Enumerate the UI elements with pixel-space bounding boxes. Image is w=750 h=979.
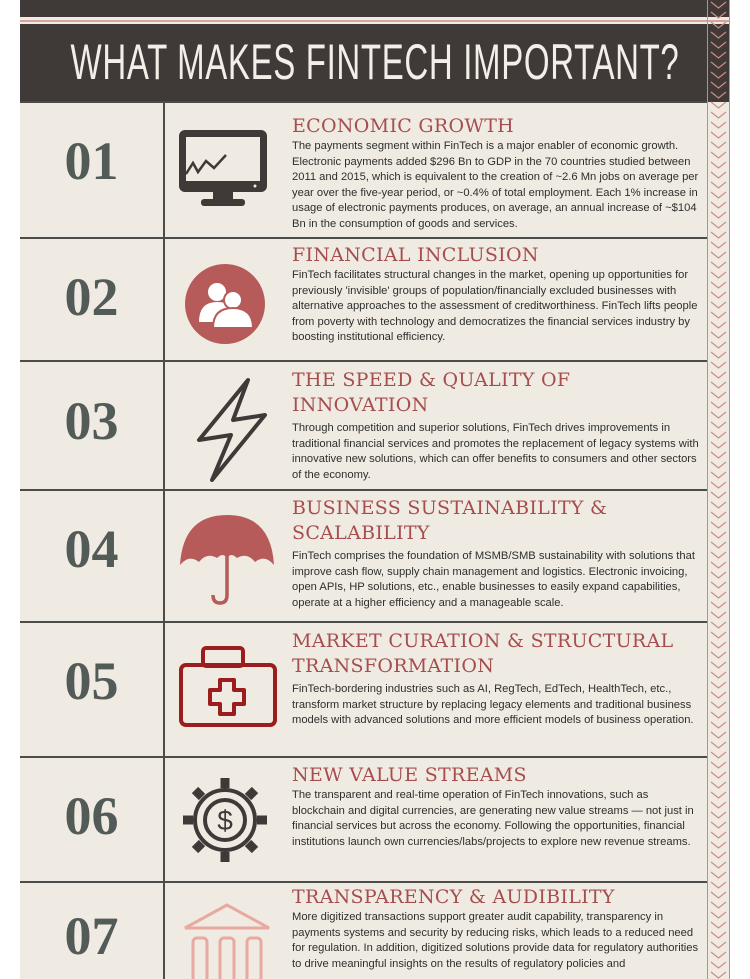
row 02 number: 02 [64,267,118,327]
text: financial inclusion: FinTech facilitates structural changes in the market, opening up opportunities for previously 'invisible' groups of population/financially excluded businesses with alternative approaches to the assessment of creditworthiness. FinTech lifts people from poverty with technology and democratizes the financial services industry by boosting institutional efficiency. [292,269,697,343]
text: economic growth: The payments segment within FinTech is a major enabler of economic growth. Electronic payments added $296 Bn to GDP in the 70 countries studied between 2011 and 2015, which is equivalent to the creation of ~2.6 Mn jobs on average per year over the five-year period, or ~0.4% of total employment. Each 1% increase in usage of electronic payments produces, on average, an annual increase of ~$104 Bn in the consumption of goods and services. [292,140,698,230]
text: new value streams: The transparent and real-time operation of FinTech innovations, such as blockchain and digital currencies, are generating new value streams — not just in financial services but across the economy. Following the opportunities, financial institutions launch own currencies/labs/projects to explore new revenue streams. [292,789,694,848]
row 04 number: 04 [64,519,118,579]
row 06 number: 06 [64,786,118,846]
row 07 number: 07 [64,906,118,966]
icon: bank columns [184,903,270,979]
text: market curation: FinTech-bordering industries such as AI, RegTech, EdTech, HealthTech, etc., transform market structure by replacing legacy elements and traditional business models with advanced solutions and more efficient models of business operation. [292,683,694,726]
text: business sustainability: BUSINESS SUSTAINABILITY & [292,497,607,519]
icon: medical kit [179,646,277,727]
row 01 number: 01 [64,131,118,191]
icon: gear dollar [183,778,267,862]
icon: people circle [185,264,265,344]
icon: umbrella [180,515,274,605]
text: business sustainability: SCALABILITY [292,522,430,544]
text: speed & quality [292,369,699,481]
row 05 number: 05 [64,651,118,711]
icon: gear dollar: $ [217,805,233,836]
text: market curation: TRANSFORMATION [292,655,494,677]
text: new value streams: NEW VALUE STREAMS [292,764,527,786]
title: WHAT MAKES FINTECH IMPORTANT? [71,34,679,90]
text: financial inclusion: FINANCIAL INCLUSION [292,244,539,266]
text: transparency: More digitized transactions support greater audit capability, transparency in payments systems and security by reducing risks, which leads to a reduced need for regulation. In addition, digitized solutions provide data for regulatory authorities to drive meaningful insights on the results of regulatory policies and [292,911,698,970]
row 03 number: 03 [64,391,118,451]
text: economic growth: ECONOMIC GROWTH [292,115,514,137]
text: speed & quality: THE SPEED & QUALITY OF [292,369,570,391]
text: business sustainability: FinTech comprises the foundation of MSMB/SMB sustainability with solutions that improve cash flow, supply chain management and logistics. Electronic invoicing, open APIs, HP solutions, etc., enable businesses to easily expand capabilities, operate at a higher efficiency and a manageable scale. [292,550,695,609]
icon: lightning [196,378,268,482]
title [20,24,730,102]
chevron strip [707,0,730,979]
text: transparency: TRANSPARENCY & AUDIBILITY [292,886,615,908]
text: market curation [292,630,694,726]
text: business sustainability [292,497,695,609]
icon: monitor [179,130,267,206]
text: speed & quality: Through competition and superior solutions, FinTech drives improvements in traditional financial services and promotes the replacement of legacy systems with innovative new solutions, which can offer benefits to consumers and other sectors of the economy. [292,422,699,481]
text: market curation: MARKET CURATION & STRUCTURAL [292,630,673,652]
text: speed & quality: INNOVATION [292,394,428,416]
